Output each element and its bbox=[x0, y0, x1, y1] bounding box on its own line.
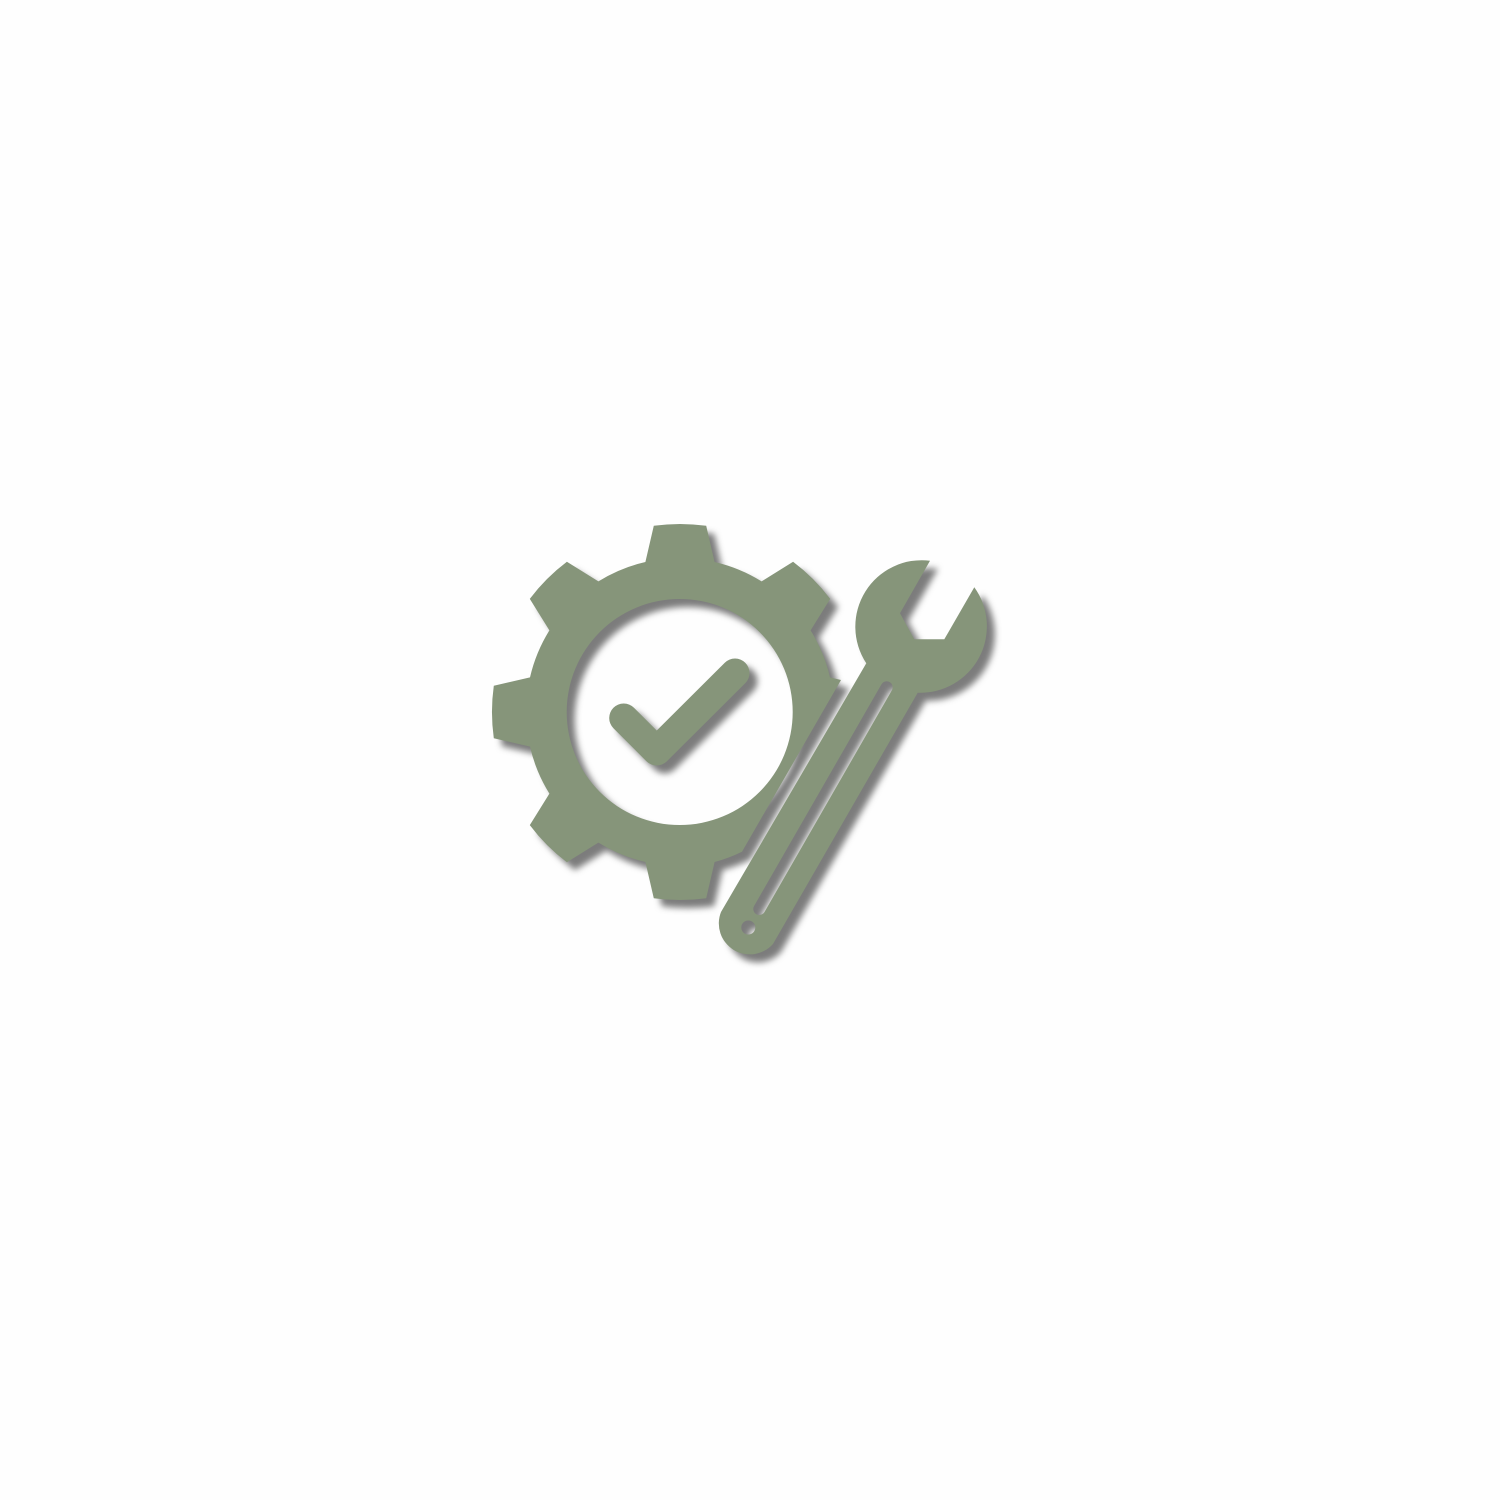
icon: checkmark bbox=[624, 673, 735, 751]
icon: gear bbox=[492, 524, 841, 900]
icon: wrench bbox=[719, 560, 987, 954]
